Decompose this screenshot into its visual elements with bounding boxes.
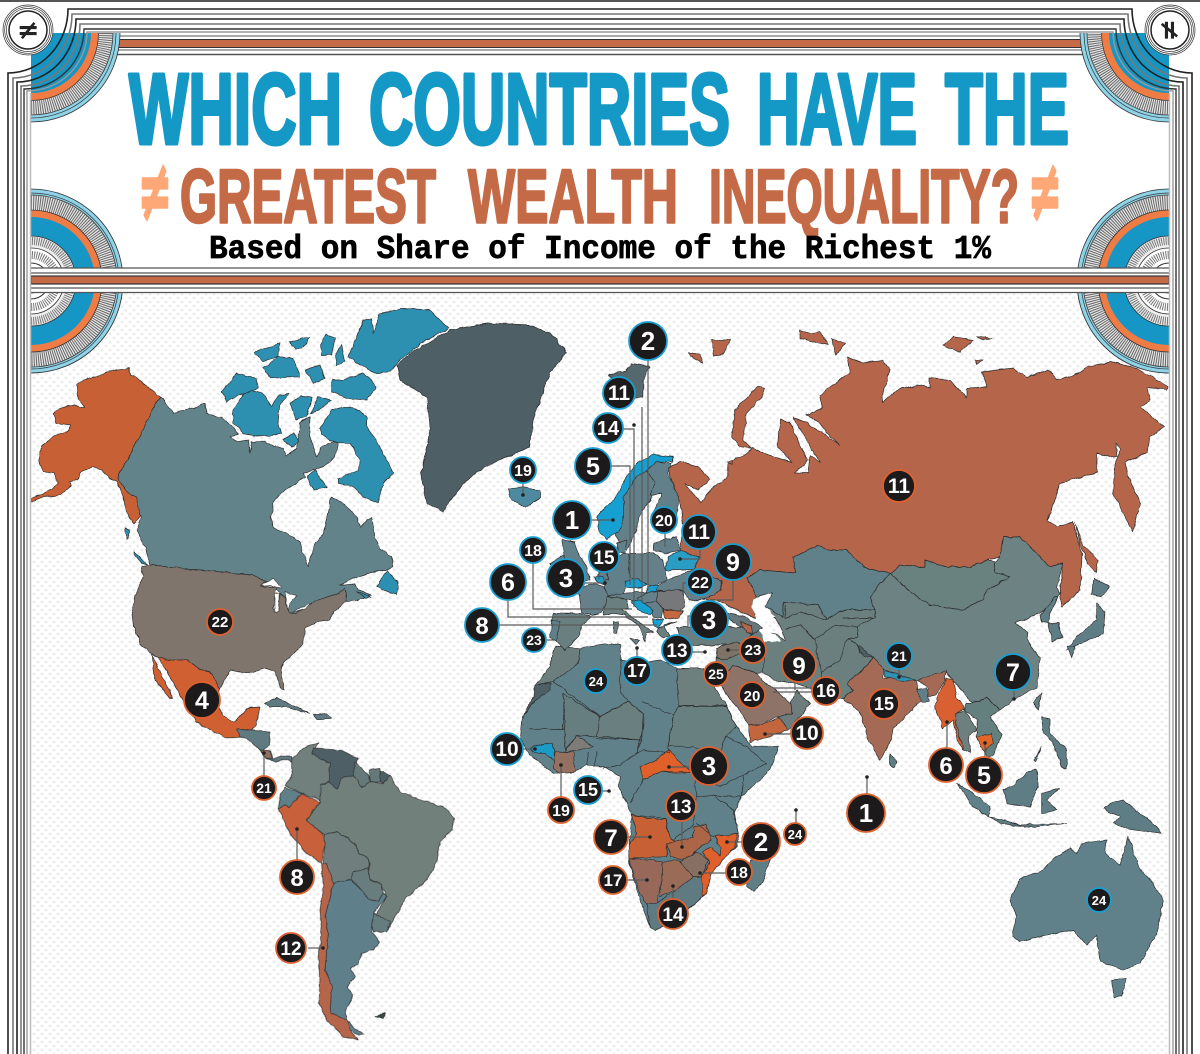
- rank numbers: 3: [702, 751, 716, 781]
- country: Greenland: [397, 323, 567, 512]
- country: Nepal: [883, 670, 917, 681]
- Borneo: [1003, 768, 1038, 807]
- country: Oman and UAE: [777, 690, 810, 730]
- country: Canada: [117, 397, 393, 613]
- lower brown band: [31, 268, 1169, 292]
- Albania and North Macedonia: [653, 618, 663, 628]
- New Guinea: [1103, 800, 1162, 833]
- country: Bulgaria: [663, 610, 683, 619]
- title line 1: HAVE: [757, 54, 917, 166]
- country: Thailand: [955, 710, 977, 753]
- country: Austria: [607, 592, 647, 602]
- title line 1: WHICH: [129, 54, 342, 166]
- rank numbers: 20: [655, 513, 673, 530]
- rank numbers: 10: [795, 722, 819, 745]
- Croatia and Bosnia: [632, 600, 653, 615]
- Svalbard: [608, 363, 650, 398]
- Novaya Zemlya and Arctic islands: [727, 330, 992, 465]
- rank numbers: 15: [593, 548, 615, 569]
- country: Sudan: [668, 706, 737, 753]
- rank numbers: 21: [891, 648, 907, 664]
- Japan: [1067, 578, 1110, 658]
- Falkland Islands: [375, 1013, 385, 1018]
- country: United Kingdom: [562, 540, 590, 587]
- region: Africa: [520, 643, 778, 930]
- title line 1: [129, 54, 1069, 166]
- Malaysia and Sumatra: [957, 783, 990, 817]
- Central Asia, Iran and Pakistan: [716, 602, 875, 700]
- Caribbean islands: [265, 698, 332, 719]
- Taiwan: [1033, 693, 1042, 710]
- subtitle: Based on Share of Income of the Richest 1%: [209, 231, 991, 268]
- rank numbers: 11: [688, 521, 710, 544]
- Java and Lesser Sunda Islands: [988, 817, 1067, 827]
- Sulawesi: [1042, 788, 1060, 813]
- rank numbers: 21: [256, 780, 272, 796]
- country: Greece: [657, 622, 677, 638]
- country: Costa Rica: [260, 749, 272, 759]
- rank numbers: 19: [552, 803, 570, 820]
- Philippines: [1042, 717, 1067, 768]
- corner medallion: top left: ≠: [17, 15, 39, 46]
- rank numbers: 3: [702, 605, 716, 635]
- title line 1: COUNTRIES: [369, 54, 730, 166]
- title line 2: WEALTH: [468, 154, 678, 240]
- rank numbers: 14: [662, 905, 684, 926]
- country: Iceland: [508, 487, 540, 507]
- country: Mongolia: [890, 560, 1010, 610]
- rank numbers: 22: [212, 614, 228, 631]
- country: Central African Republic: [640, 750, 693, 780]
- Tasmania: [1112, 978, 1127, 998]
- country: Angola: [628, 815, 675, 858]
- country: Saudi Arabia: [720, 665, 793, 725]
- rank numbers: 15: [874, 694, 894, 714]
- leader lines: [264, 360, 1014, 948]
- map background: [0, 293, 1200, 1054]
- country: Kashmir region: [855, 640, 878, 657]
- country: Burkina Faso: [565, 735, 593, 752]
- country: Namibia: [628, 858, 663, 903]
- country: Norway: [597, 455, 673, 540]
- rank numbers: 24: [1092, 893, 1107, 908]
- rank numbers: 3: [559, 563, 573, 593]
- country: Laos and Vietnam: [965, 698, 1002, 757]
- frame: white side strips: [0, 293, 1200, 1054]
- country: Egypt: [677, 668, 727, 706]
- country: Italy: [603, 597, 653, 642]
- country: Belgium: [593, 576, 605, 585]
- region: Russia and northern Asia: [668, 330, 1168, 710]
- country: Belarus: [665, 547, 700, 570]
- rank numbers: 2: [754, 827, 768, 857]
- country: Madagascar: [747, 860, 770, 892]
- region: Arabian Peninsula: [720, 665, 810, 743]
- country: Serbia: [640, 602, 663, 618]
- country: Czechia: [625, 578, 647, 588]
- country: Botswana: [660, 860, 693, 897]
- header panel: [0, 0, 1200, 373]
- country: India: [843, 657, 947, 760]
- country: Armenia: [740, 622, 753, 634]
- rank numbers: 22: [691, 575, 709, 592]
- country: Myanmar: [935, 678, 965, 750]
- country: Finland: [647, 462, 678, 527]
- country: Poland: [628, 553, 667, 587]
- country: Niger: [597, 702, 643, 740]
- country: Brazil: [307, 775, 455, 932]
- ornament: rings in the header: [0, 189, 1200, 373]
- country: Spain: [552, 613, 592, 650]
- country: Morocco: [535, 647, 580, 685]
- country: Zambia: [667, 825, 712, 860]
- country: Ukraine: [657, 570, 722, 600]
- ornament: rings top corners: [0, 0, 1200, 122]
- country: Chile: [318, 863, 358, 1040]
- country: Netherlands: [597, 568, 608, 580]
- header panel: ≠: [1028, 141, 1062, 241]
- region: Europe: [508, 363, 722, 650]
- rank numbers: 5: [586, 453, 600, 481]
- rank numbers: 18: [524, 543, 542, 560]
- country: Portugal: [550, 620, 560, 641]
- country: South Africa: [647, 877, 707, 930]
- country: Romania: [657, 590, 685, 611]
- country: Turkey: [677, 627, 752, 645]
- country: Paraguay: [352, 868, 383, 902]
- header panel: ≠: [138, 141, 172, 241]
- rank numbers: 8: [475, 613, 489, 640]
- top brown band: [31, 36, 1169, 54]
- country: Zimbabwe: [680, 852, 708, 877]
- Central America: [237, 730, 292, 762]
- country: Denmark: [617, 540, 627, 553]
- country: Syria: [717, 642, 743, 660]
- country: Mexico: [152, 655, 260, 738]
- country: Ecuador: [278, 787, 302, 808]
- country: Guinea: [530, 743, 555, 762]
- rank numbers: 10: [495, 738, 519, 761]
- country: United States: [132, 565, 347, 690]
- rank numbers: 7: [1006, 659, 1020, 687]
- rank numbers: 15: [578, 780, 598, 800]
- country: Slovakia: [647, 585, 662, 593]
- country: Western Sahara: [522, 683, 552, 718]
- rank numbers: 23: [526, 632, 542, 648]
- Canadian Arctic islands: [125, 308, 448, 598]
- country: Sri Lanka: [890, 753, 897, 768]
- world map: [32, 308, 1168, 1040]
- country: Alaska (USA): [32, 368, 160, 523]
- country: Peru: [278, 794, 325, 863]
- country: Mali: [530, 693, 600, 750]
- Caucasus: [722, 611, 763, 635]
- rank numbers: 13: [670, 797, 692, 818]
- country: France: [578, 583, 608, 615]
- rank numbers: 1: [859, 798, 873, 828]
- country: Cambodia: [977, 733, 993, 752]
- rank numbers: [195, 326, 1107, 960]
- Central Asian borders: [757, 605, 875, 692]
- rank numbers: 20: [744, 688, 760, 705]
- Guianas: [353, 762, 390, 787]
- rank numbers: 5: [977, 762, 991, 790]
- rank numbers: 11: [608, 382, 630, 405]
- Africa base landmass: [520, 643, 778, 930]
- country: Mozambique: [702, 833, 737, 897]
- rank numbers: 8: [290, 865, 304, 892]
- corner medallion: top right: [1145, 5, 1195, 55]
- country: Sweden: [615, 470, 655, 550]
- country: Hungary: [637, 591, 660, 603]
- title line 2: GREATEST: [180, 154, 436, 240]
- rank markers: low-share countries (blue ring): [465, 322, 1111, 912]
- country: Germany: [605, 553, 630, 597]
- country: China: [848, 537, 1063, 710]
- region: South America and Central America: [237, 730, 455, 1040]
- Korea: [1040, 597, 1063, 642]
- rank numbers: 14: [597, 418, 620, 440]
- rank numbers: 4: [195, 687, 209, 715]
- country: Colombia: [285, 743, 332, 800]
- rank numbers: 2: [641, 326, 655, 356]
- country: Yemen: [748, 717, 788, 743]
- Franz Josef Land: [688, 340, 730, 363]
- ornament: lower rings behind the map: [31, 294, 1169, 374]
- corner medallion: top left: [3, 5, 53, 55]
- corner medallion: top right: ≠: [1154, 19, 1185, 41]
- leader end dots: [262, 423, 1016, 950]
- rank numbers: 6: [939, 753, 953, 780]
- African borders: [553, 660, 767, 840]
- rank numbers: 9: [726, 549, 740, 577]
- region: Turkey and Caucasus: [677, 611, 763, 660]
- rank numbers: 13: [666, 641, 688, 662]
- rank numbers: 1: [565, 505, 579, 535]
- Baltic states: [653, 537, 680, 553]
- rank numbers: 6: [501, 569, 515, 597]
- rank numbers: 24: [788, 827, 803, 842]
- Sakhalin: [1075, 523, 1098, 572]
- rank numbers: 16: [816, 681, 836, 701]
- rank numbers: 18: [730, 865, 748, 882]
- rank numbers: 7: [604, 825, 618, 852]
- rank markers: high-share countries (orange ring): [184, 470, 1002, 963]
- rank numbers: 25: [708, 666, 724, 682]
- country: Ireland: [550, 555, 567, 568]
- country: Australia: [1010, 837, 1163, 970]
- rank numbers: 24: [589, 674, 604, 689]
- Mediterranean islands: [613, 622, 640, 645]
- title line 2: [180, 154, 1019, 240]
- region: South and Southeast Asia: [843, 657, 1163, 998]
- rank numbers: 23: [745, 642, 761, 659]
- rank numbers: 17: [604, 871, 622, 890]
- Caspian Sea: [752, 593, 782, 642]
- country: Russia: [668, 357, 1168, 618]
- country: Côte d'Ivoire: [553, 752, 575, 773]
- rank numbers: 11: [888, 475, 910, 498]
- rank numbers: 9: [792, 653, 806, 680]
- country: Bolivia: [323, 832, 368, 883]
- country: Argentina: [325, 879, 387, 1035]
- region: North America: [32, 308, 448, 719]
- rank numbers: 17: [627, 661, 647, 681]
- rank numbers: 12: [280, 939, 302, 960]
- country: Venezuela: [312, 748, 358, 788]
- country: Bangladesh: [917, 688, 930, 703]
- title line 1: THE: [945, 54, 1069, 166]
- country: Kazakhstan: [747, 545, 890, 620]
- country: Uruguay: [372, 913, 390, 932]
- Great Lakes: [260, 578, 312, 613]
- rank numbers: 19: [514, 463, 532, 480]
